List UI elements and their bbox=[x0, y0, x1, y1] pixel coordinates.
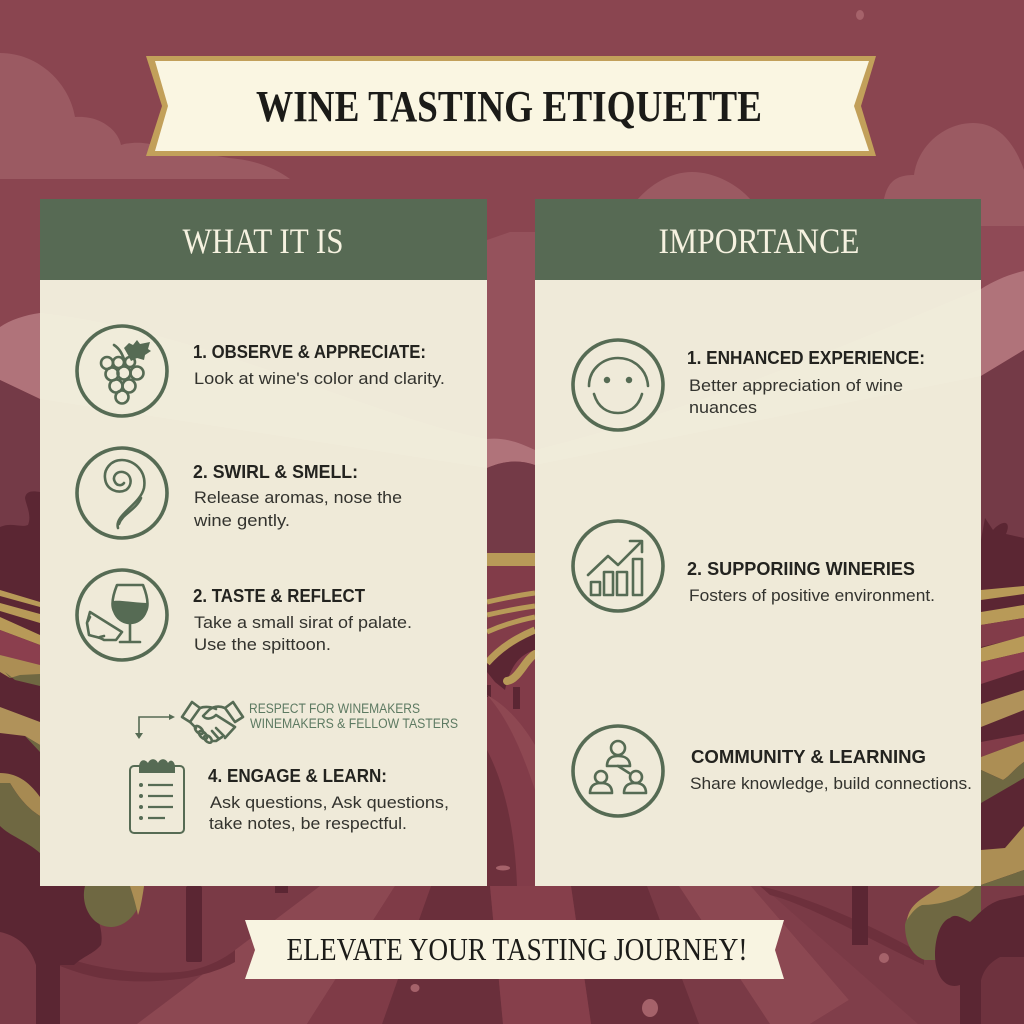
text: taste: Use the spittoon. bbox=[194, 636, 331, 654]
text: engage: Ask questions, Ask questions, bbox=[210, 794, 449, 812]
icon: wine glass and spittoon bbox=[77, 570, 167, 660]
footer text: ELEVATE YOUR TASTING JOURNEY! bbox=[286, 931, 748, 967]
text: engage: 4. ENGAGE & LEARN: bbox=[208, 766, 387, 786]
text: swirl: wine gently. bbox=[193, 512, 290, 530]
icon: aroma swirl bbox=[77, 448, 167, 538]
text: supporting wineries: Fosters of positive environment. bbox=[689, 587, 935, 605]
text: enhanced experience: nuances bbox=[689, 399, 757, 417]
icon: handshake bbox=[182, 702, 243, 744]
text: swirl bbox=[193, 462, 402, 530]
icon: grapes bbox=[77, 326, 167, 416]
vine rows base bbox=[0, 586, 40, 886]
right vine rows bbox=[981, 586, 1024, 915]
text: swirl: 2. SWIRL & SMELL: bbox=[193, 462, 358, 482]
panel header: importance bbox=[535, 199, 981, 280]
text: community: COMMUNITY & LEARNING bbox=[691, 747, 926, 767]
center vine rows bbox=[487, 593, 535, 632]
item 3: taste bbox=[77, 570, 412, 660]
text: enhanced experience: 1. ENHANCED EXPERIENCE: bbox=[687, 348, 925, 368]
heading: importance: IMPORTANCE bbox=[658, 221, 860, 261]
text: community: Share knowledge, build connections. bbox=[690, 775, 972, 793]
foreground stripes bbox=[0, 886, 1024, 1024]
item 4: engage bbox=[130, 759, 449, 833]
far hills bbox=[0, 350, 1024, 600]
lower left canopy bbox=[0, 835, 102, 1024]
left tree bbox=[84, 886, 288, 962]
item 2: swirl bbox=[77, 448, 402, 538]
left vine rows bbox=[0, 590, 40, 853]
item 3: community bbox=[573, 726, 972, 816]
right tree bbox=[852, 886, 1024, 1024]
text: taste bbox=[193, 586, 412, 654]
icon: smiley bbox=[573, 340, 663, 430]
panel body: what it is bbox=[40, 280, 487, 886]
icon: community people bbox=[573, 726, 663, 816]
icon: notepad bbox=[130, 759, 184, 833]
tree silhouettes bbox=[0, 491, 40, 590]
footer banner bbox=[245, 920, 784, 979]
text: taste: 2. TASTE & REFLECT bbox=[193, 586, 365, 606]
text: respect callout: RESPECT FOR WINEMAKERS bbox=[249, 701, 420, 716]
text: engage: take notes, be respectful. bbox=[209, 815, 407, 833]
text: enhanced experience bbox=[687, 348, 925, 417]
panel: importance bbox=[535, 199, 981, 886]
text: enhanced experience: Better appreciation of wine bbox=[689, 377, 903, 395]
text: respect callout: WINEMAKERS & FELLOW TASTERS bbox=[250, 716, 458, 731]
text: respect callout bbox=[249, 701, 458, 731]
pale hill band bbox=[0, 271, 1024, 468]
text: supporting wineries: 2. SUPPORIING WINERIES bbox=[687, 559, 915, 579]
panel body: importance bbox=[535, 280, 981, 886]
text: observe: 1. OBSERVE & APPRECIATE: bbox=[193, 342, 426, 362]
title banner bbox=[146, 56, 876, 156]
text: community bbox=[690, 747, 972, 793]
clouds bbox=[0, 53, 1024, 228]
text: supporting wineries bbox=[687, 559, 935, 605]
center path shapes bbox=[487, 695, 535, 790]
text: engage bbox=[208, 766, 449, 833]
panel header: what it is bbox=[40, 199, 487, 280]
text: observe bbox=[193, 342, 445, 388]
text: swirl: Release aromas, nose the bbox=[194, 489, 402, 507]
text: taste: Take a small sirat of palate. bbox=[194, 614, 412, 632]
item 1: observe bbox=[77, 326, 445, 416]
text: observe: Look at wine's color and clarity. bbox=[194, 370, 445, 388]
icon: growth chart bbox=[573, 521, 663, 611]
panel: what it is bbox=[40, 199, 487, 886]
heading: what it is: WHAT IT IS bbox=[182, 221, 344, 261]
title: WINE TASTING ETIQUETTE bbox=[256, 82, 762, 131]
arrow: elbow connector bbox=[135, 714, 175, 739]
item 1: enhanced experience bbox=[573, 340, 925, 430]
item 2: supporting wineries bbox=[573, 521, 935, 611]
